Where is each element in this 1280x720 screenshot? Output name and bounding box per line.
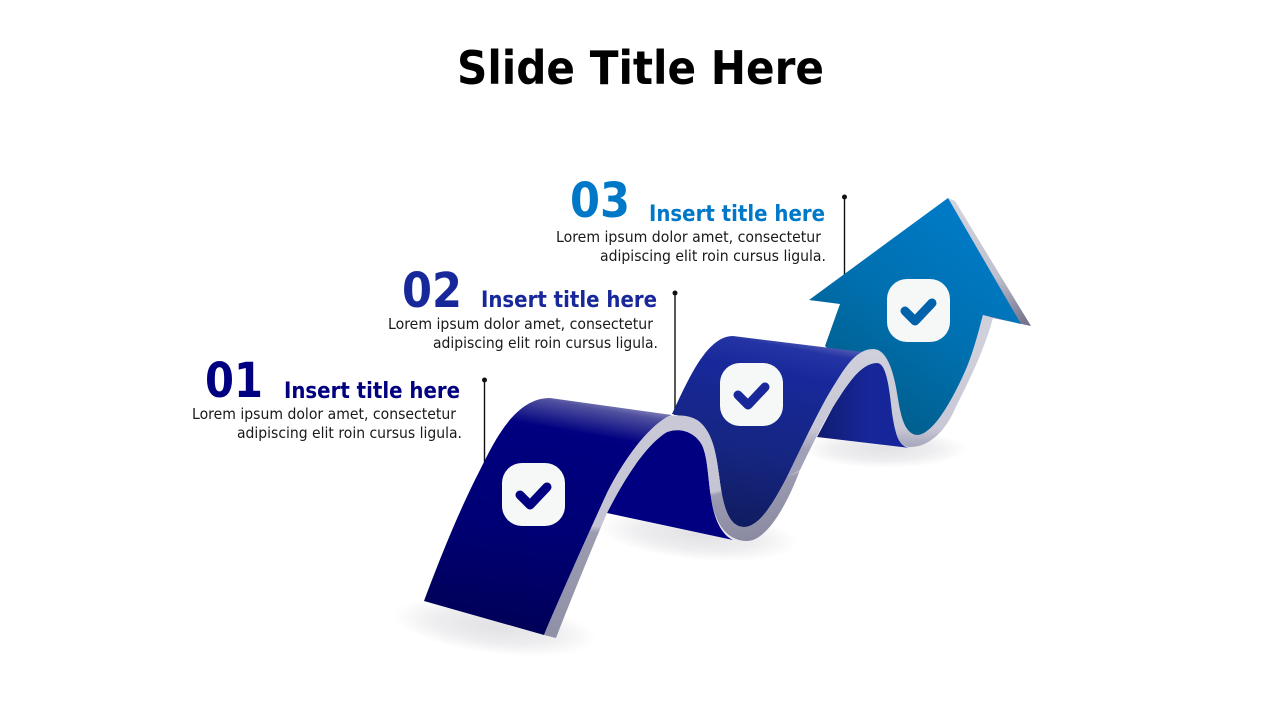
heading 03: Insert title here: [649, 202, 825, 227]
body 02: Lorem ipsum dolor amet, consectetur: [388, 315, 654, 333]
text block 01: [192, 353, 462, 442]
ribbon 1 underside: [607, 430, 733, 540]
heading 01: Insert title here: [284, 379, 460, 404]
text block 03: [556, 173, 826, 265]
number 02: 02: [402, 263, 462, 319]
ribbon 1 silver edge: [544, 415, 800, 638]
arrow front face: [809, 198, 1021, 436]
body 01: Lorem ipsum dolor amet, consectetur: [192, 405, 457, 423]
body 02: adipiscing elit roin cursus ligula.: [433, 334, 658, 352]
heading 02: Insert title here: [481, 288, 657, 313]
icon: check 3: [905, 303, 932, 321]
body 03: Lorem ipsum dolor amet, consectetur: [556, 228, 822, 246]
body 01: [192, 405, 462, 442]
number 03: 03: [570, 173, 630, 229]
icon badge 2: [720, 363, 783, 426]
ribbon 1 front face: [424, 398, 672, 635]
title: Slide Title Here: [457, 41, 824, 95]
icon: check 2: [738, 387, 765, 405]
ribbon 2 silver edge: [787, 315, 993, 477]
arrow head and stem: [809, 198, 1031, 436]
text block 02: [388, 263, 658, 352]
leader lines: [482, 194, 847, 462]
body 02: [388, 315, 658, 352]
ground shadows: [390, 430, 967, 666]
icon: check 1: [520, 487, 547, 505]
icon badge 1: [502, 463, 565, 526]
icon badge 3: [887, 279, 950, 342]
body 01: adipiscing elit roin cursus ligula.: [237, 424, 462, 442]
number 01: 01: [205, 353, 263, 409]
ribbon 2 underside: [817, 363, 910, 448]
body 03: [556, 228, 826, 265]
body 03: adipiscing elit roin cursus ligula.: [600, 247, 826, 265]
arrow head side edge: [948, 198, 1031, 326]
ribbon 2 front face: [672, 336, 863, 527]
